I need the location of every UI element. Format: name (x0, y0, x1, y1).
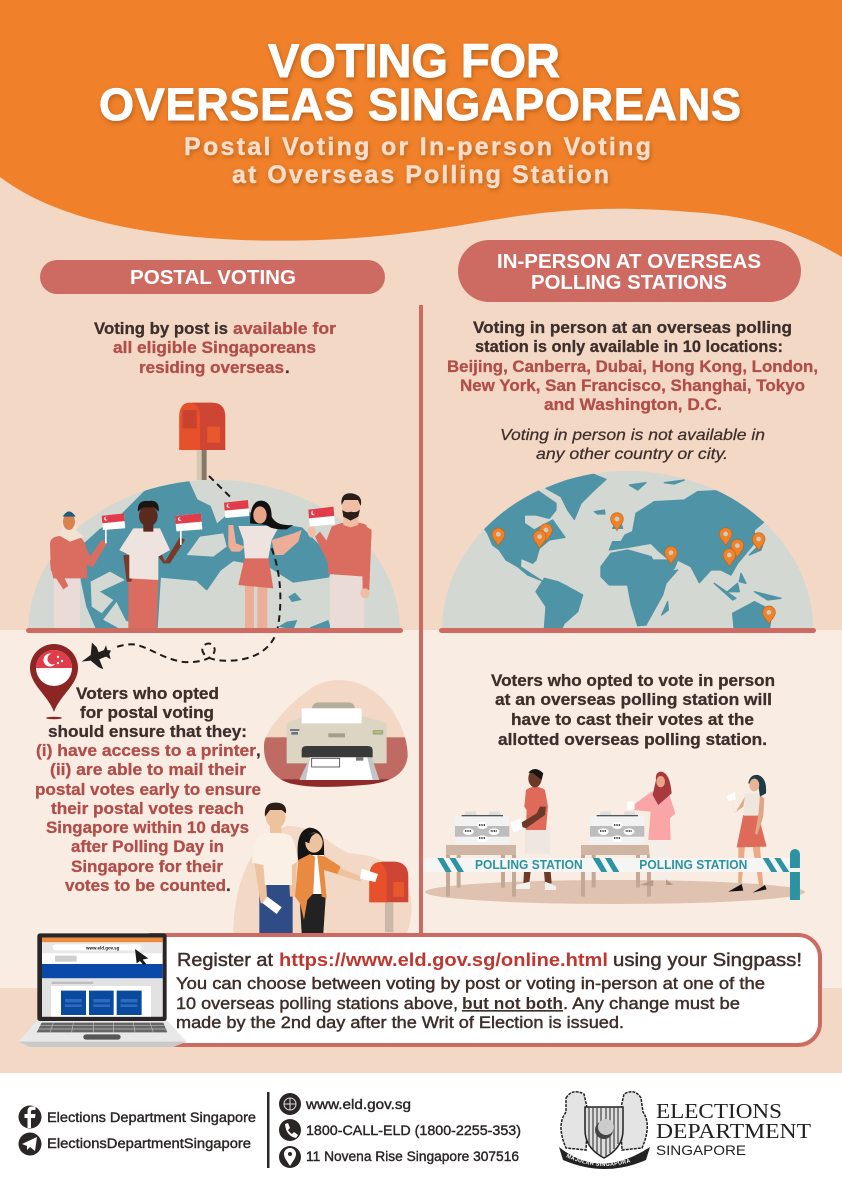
text: postal voting availability: residing overseas (139, 358, 284, 377)
illustration: printer in blob (264, 680, 408, 787)
text: postal voter requirements: (ii) are able to mail their (50, 760, 246, 779)
background blob (233, 826, 412, 933)
logo text: Elections Department Singapore: ELECTIONS (656, 1099, 782, 1123)
text: postal voter requirements: Singapore within 10 days (46, 818, 249, 837)
barrier tape: POLLING STATION (639, 858, 747, 872)
text: postal voter requirements: after Polling Day in (71, 837, 224, 856)
icon: location (279, 1146, 301, 1168)
text: in-person availability and locations: station is only available in 10 locations: (475, 337, 783, 356)
logo: Singapore crest (559, 1091, 650, 1169)
heading: in-person at overseas polling stations (458, 240, 801, 302)
subtitle (184, 133, 651, 189)
polling table 2 (581, 811, 651, 897)
text: in-person availability and locations: Voting in person at an overseas polling (473, 318, 792, 337)
globe base line left (26, 628, 403, 633)
text: postal voter requirements: votes to be counted (65, 876, 226, 895)
choice explanation: made by the 2nd day after the Writ of Election is issued. (176, 1014, 624, 1032)
illustration: world map with polling location pins (442, 471, 813, 630)
text: postal voter requirements (35, 684, 261, 895)
text: in-person voter allotment: have to cast their votes at the (511, 710, 754, 729)
illustration: polling station (423, 769, 805, 904)
text: postal voter requirements: their postal votes reach (51, 799, 244, 818)
title: VOTING FOR (268, 34, 560, 87)
text: postal voting availability: all eligible Singaporeans (113, 338, 316, 357)
icon: facebook (18, 1106, 42, 1128)
text: postal voter requirements: Voters who opted (76, 684, 219, 703)
heading: in-person at overseas polling stations: POLLING STATIONS (531, 272, 727, 294)
choice explanation: 10 overseas polling stations above, (176, 995, 458, 1013)
footer: contact details (279, 1093, 521, 1168)
centre divider (419, 305, 423, 937)
voter: man in red shirt (511, 769, 556, 890)
text: italic note: Voting in person is not available in (500, 427, 765, 444)
text: in-person availability and locations (447, 318, 818, 414)
text: postal voting availability (94, 319, 336, 377)
mailbox on post (179, 403, 225, 480)
heading: postal voting: POSTAL VOTING (130, 267, 296, 289)
text: in-person availability and locations: and Washington, D.C. (544, 395, 722, 414)
illustration: laptop with ELD website (18, 933, 187, 1047)
icon: plane (82, 643, 111, 669)
illustration: globe, people with flags, mailbox (28, 403, 400, 669)
heading: in-person at overseas polling stations: IN-PERSON AT OVERSEAS (497, 251, 761, 273)
text: postal voter requirements: (i) have access to a printer (36, 741, 256, 760)
illustration: couple posting envelope (233, 803, 412, 933)
polling table 1 (446, 811, 516, 897)
person: woman in hijab (50, 511, 125, 628)
footer divider (267, 1092, 270, 1168)
logo text: Elections Department Singapore: DEPARTMENT (656, 1119, 811, 1143)
footer: contact details: www.eld.gov.sg (305, 1097, 411, 1112)
text: in-person voter allotment: allotted overseas polling station. (498, 730, 767, 749)
icon: phone (279, 1119, 301, 1141)
text: postal voter requirements: postal votes early to ensure (35, 780, 261, 799)
footer: social links (18, 1106, 256, 1156)
ground shadow (425, 880, 805, 904)
logo: Singapore crest: MAJULAH SINGAPURA (566, 1154, 630, 1166)
register line: Register at (177, 949, 273, 970)
register line: https://www.eld.gov.sg/online.html (279, 949, 608, 970)
text: postal voter requirements: . (226, 876, 231, 895)
register line (177, 949, 802, 970)
text: postal voter requirements: Singapore for their (71, 857, 223, 876)
text: italic note (500, 427, 765, 463)
barrier tape (423, 849, 800, 900)
globe base line right (439, 628, 816, 633)
text: postal voting availability: . (285, 358, 290, 377)
footer: social links: ElectionsDepartmentSingapore (47, 1136, 251, 1151)
text: postal voter requirements: for postal voting (80, 703, 214, 722)
globe (28, 480, 400, 630)
illustration: laptop with ELD website: www.eld.gov.sg (85, 945, 119, 950)
heading: postal voting (40, 260, 385, 294)
text: postal voting availability: available for (233, 319, 336, 338)
text: postal voter requirements: , (256, 741, 261, 760)
barrier tape: POLLING STATION (475, 858, 583, 872)
voter: woman in hijab (627, 772, 675, 886)
person: woman in skirt (224, 500, 302, 628)
dashed route (113, 476, 280, 662)
header: orange wave (0, 0, 842, 257)
text: in-person voter allotment: at an overseas polling station will (495, 690, 772, 709)
person: man in white t-shirt (119, 501, 202, 628)
man (252, 803, 297, 933)
choice explanation (176, 975, 765, 1032)
text: in-person availability and locations: New York, San Francisco, Shanghai, Tokyo (460, 376, 805, 395)
choice explanation: but not both (462, 995, 563, 1013)
logo text: Elections Department Singapore: SINGAPORE (656, 1142, 746, 1158)
footer: social links: Elections Department Singapore (47, 1110, 256, 1125)
text: italic note: any other country or city. (536, 446, 728, 463)
text: in-person availability and locations: Beijing, Canberra, Dubai, Hong Kong, London, (447, 357, 818, 376)
subtitle: at Overseas Polling Station (232, 161, 609, 189)
voter: woman in skirt (727, 775, 767, 893)
text: in-person voter allotment (491, 671, 775, 749)
person: bearded man (308, 493, 372, 628)
text: postal voting availability: Voting by post is (94, 319, 228, 338)
footer: contact details: 11 Novena Rise Singapore 307516 (306, 1149, 519, 1164)
choice explanation: . Any change must be (563, 995, 740, 1013)
title (99, 34, 741, 130)
choice explanation: You can choose between voting by post or voting in-person at one of the (176, 975, 765, 993)
woman (295, 828, 378, 933)
icon: telegram (18, 1132, 42, 1156)
icon: Singapore map pin (30, 644, 78, 719)
title: OVERSEAS SINGAPOREANS (99, 79, 741, 130)
subtitle: Postal Voting or In-person Voting (184, 133, 651, 161)
logo text: Elections Department Singapore (656, 1099, 811, 1158)
text: in-person voter allotment: Voters who opted to vote in person (491, 671, 775, 690)
mailbox (369, 862, 408, 932)
register line: using your Singpass! (613, 949, 802, 970)
panel: register callout (130, 935, 820, 1045)
text: postal voter requirements: should ensure that they: (48, 722, 247, 741)
icon: globe (279, 1093, 301, 1115)
footer: contact details: 1800-CALL-ELD (1800-2255-353) (306, 1123, 521, 1138)
